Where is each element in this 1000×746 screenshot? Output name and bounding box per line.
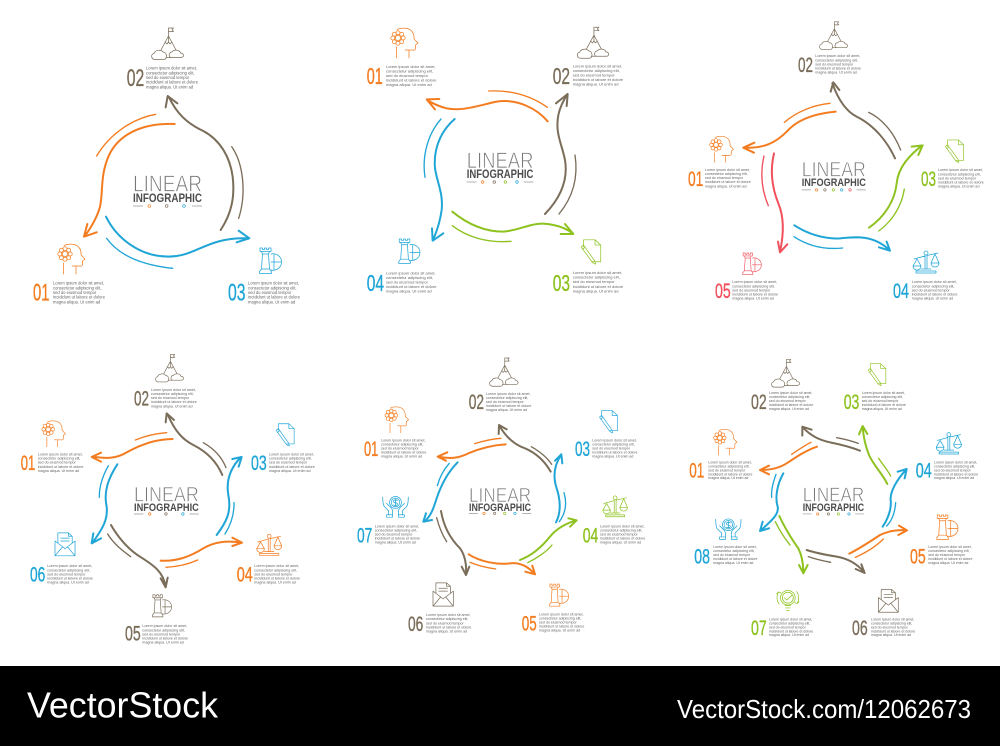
step 02: magna aliqua. Ut enim ad	[769, 407, 809, 411]
step 06: consectetur adipiscing elit,	[426, 617, 468, 621]
step 04: magna aliqua. Ut enim ad	[386, 289, 432, 294]
step 01: incididunt ut labore et dolore	[386, 77, 437, 82]
arrows	[760, 426, 907, 573]
step 01: incididunt ut labore et dolore	[708, 472, 753, 476]
center title: LINEAR	[802, 158, 866, 182]
step 07: magna aliqua. Ut enim ad	[769, 633, 809, 637]
step 01: magna aliqua. Ut enim ad	[38, 469, 79, 473]
step 01: Lorem ipsum dolor sit amet,	[53, 281, 104, 286]
step 03: magna aliqua. Ut enim ad	[248, 299, 296, 304]
step 02: Lorem ipsum dolor sit amet,	[815, 54, 860, 58]
step 05: sed do eiusmod tempor	[142, 632, 181, 636]
step 01: consectetur adipiscing elit,	[705, 172, 748, 176]
step 06	[30, 533, 93, 587]
step 03: incididunt ut labore et dolore	[573, 284, 624, 289]
center title	[802, 158, 866, 191]
step 07: 07	[357, 525, 372, 548]
step 05: 05	[522, 613, 537, 636]
step 02: magna aliqua. Ut enim ad	[146, 84, 194, 89]
step 03: magna aliqua. Ut enim ad	[862, 407, 902, 411]
arrow: brown	[166, 96, 243, 230]
step 06: incididunt ut labore et dolore	[426, 625, 471, 629]
step 04: sed do eiusmod tempor	[254, 572, 293, 576]
arrow: brown	[545, 94, 576, 214]
arrow: green	[452, 212, 573, 242]
step 04: 04	[237, 564, 253, 587]
panel: four-step cycle	[367, 27, 624, 296]
step 02: 02	[798, 54, 813, 77]
step 02	[751, 359, 813, 414]
step 01: Lorem ipsum dolor sit amet,	[705, 168, 750, 172]
step 04: Lorem ipsum dolor sit amet,	[934, 460, 977, 464]
step 01: consectetur adipiscing elit,	[38, 457, 80, 461]
step 04: consectetur adipiscing elit,	[386, 275, 433, 280]
step 02: incididunt ut labore et dolore	[573, 77, 624, 82]
arrows	[84, 96, 249, 268]
step 04: incididunt ut labore et dolore	[934, 472, 978, 476]
step 02: consectetur adipiscing elit,	[573, 68, 620, 73]
step 01: incididunt ut labore et dolore	[705, 180, 751, 184]
step 05: Lorem ipsum dolor sit amet,	[732, 280, 777, 284]
center title: INFOGRAPHIC	[467, 168, 534, 181]
step 06: consectetur adipiscing elit,	[47, 568, 90, 572]
step 01	[689, 429, 753, 483]
step 06	[852, 589, 915, 640]
step 05: 05	[715, 280, 731, 303]
step 05: sed do eiusmod tempor	[539, 621, 578, 625]
center title: LINEAR	[803, 484, 864, 507]
step 04: incididunt ut labore et dolore	[386, 284, 437, 289]
step 01: Lorem ipsum dolor sit amet,	[38, 452, 83, 456]
step 03: Lorem ipsum dolor sit amet,	[592, 438, 637, 442]
arrow: green 7	[775, 516, 808, 573]
step 03: sed do eiusmod tempor	[862, 399, 899, 403]
step 06: sed do eiusmod tempor	[47, 572, 86, 576]
step 03: magna aliqua. Ut enim ad	[938, 185, 980, 189]
footer brand: VectorStock	[27, 684, 219, 726]
step 03: 03	[228, 280, 246, 307]
step 02: incididunt ut labore et dolore	[146, 80, 199, 85]
step 06: magna aliqua. Ut enim ad	[47, 581, 89, 585]
step 07	[357, 497, 420, 548]
step 03: 03	[844, 391, 859, 414]
step 02: 02	[553, 63, 570, 89]
step 05: magna aliqua. Ut enim ad	[142, 641, 184, 645]
step 03: Lorem ipsum dolor sit amet,	[269, 452, 314, 456]
step 01: magna aliqua. Ut enim ad	[381, 455, 422, 459]
arrow: red	[762, 153, 787, 252]
step 01: sed do eiusmod tempor	[53, 290, 97, 295]
arrow: brown 6	[437, 511, 469, 575]
step 07: sed do eiusmod tempor	[375, 533, 413, 537]
step 05: Lorem ipsum dolor sit amet,	[142, 624, 187, 628]
step 02: consectetur adipiscing elit,	[815, 58, 858, 62]
step 04: Lorem ipsum dolor sit amet,	[912, 280, 957, 284]
step 04: consectetur adipiscing elit,	[254, 568, 297, 572]
step 05: magna aliqua. Ut enim ad	[732, 297, 774, 301]
step 04: 04	[583, 525, 599, 548]
step 03: incididunt ut labore et dolore	[862, 403, 906, 407]
step 02: magna aliqua. Ut enim ad	[573, 82, 618, 87]
step 06: magna aliqua. Ut enim ad	[426, 629, 467, 633]
step 06: magna aliqua. Ut enim ad	[871, 633, 911, 637]
step 02	[798, 22, 861, 77]
step 02: sed do eiusmod tempor	[769, 399, 807, 403]
step 03	[553, 240, 624, 296]
step 08	[694, 519, 758, 568]
step 02: consectetur adipiscing elit,	[486, 396, 528, 400]
arrow: blue	[794, 225, 890, 251]
step 02: Lorem ipsum dolor sit amet,	[486, 392, 531, 396]
step 06	[408, 583, 471, 636]
step 02: 02	[469, 391, 484, 414]
panel: five-step cycle	[688, 22, 984, 303]
arrow: orange	[743, 103, 836, 153]
step 02: Lorem ipsum dolor sit amet,	[146, 66, 197, 71]
step 06: 06	[408, 613, 423, 636]
step 08: 08	[694, 545, 710, 568]
center title: LINEAR	[133, 171, 202, 197]
arrows	[424, 91, 576, 242]
step 03: consectetur adipiscing elit,	[248, 285, 297, 290]
step 01: magna aliqua. Ut enim ad	[705, 184, 747, 188]
step 03: 03	[575, 438, 590, 461]
step 01: sed do eiusmod tempor	[38, 461, 77, 465]
step 01: incididunt ut labore et dolore	[53, 295, 106, 300]
step 02: 02	[751, 391, 767, 414]
step 02: incididunt ut labore et dolore	[815, 66, 861, 70]
step 08: incididunt ut labore et dolore	[713, 557, 758, 561]
step 02: sed do eiusmod tempor	[146, 75, 190, 80]
arrow: orange	[84, 114, 175, 237]
panel: seven-step cycle	[357, 358, 645, 636]
step 01: Lorem ipsum dolor sit amet,	[708, 460, 752, 464]
step 06: consectetur adipiscing elit,	[871, 621, 912, 625]
arrow: blue 8	[760, 473, 783, 531]
panel: eight-step cycle	[689, 359, 978, 640]
step 03: Lorem ipsum dolor sit amet,	[938, 168, 983, 172]
step 01: 01	[21, 452, 35, 475]
arrow: orange	[427, 91, 548, 121]
step 08: Lorem ipsum dolor sit amet,	[713, 545, 757, 549]
step 04: Lorem ipsum dolor sit amet,	[386, 270, 436, 275]
step 01: consectetur adipiscing elit,	[386, 68, 433, 73]
step 01: Lorem ipsum dolor sit amet,	[386, 64, 436, 69]
step 02: incididunt ut labore et dolore	[486, 404, 531, 408]
step 08: sed do eiusmod tempor	[713, 553, 751, 557]
arrow: brown 2	[499, 425, 552, 472]
step 04: consectetur adipiscing elit,	[600, 528, 642, 532]
step 04: consectetur adipiscing elit,	[912, 284, 954, 288]
step 04: Lorem ipsum dolor sit amet,	[600, 524, 645, 528]
step 02: magna aliqua. Ut enim ad	[151, 404, 193, 408]
step 05	[715, 253, 778, 303]
step 03: incididunt ut labore et dolore	[938, 180, 984, 184]
step 01	[367, 28, 437, 89]
step 04: sed do eiusmod tempor	[386, 280, 429, 285]
center title: LINEAR	[467, 148, 533, 173]
arrow: blue	[106, 217, 249, 268]
step 03	[228, 248, 301, 307]
step 03: incididunt ut labore et dolore	[269, 465, 315, 469]
step 06: sed do eiusmod tempor	[871, 625, 909, 629]
arrow: green	[869, 145, 923, 231]
step 01: 01	[689, 460, 704, 483]
arrow: brown 5	[108, 525, 168, 587]
footer image id: VectorStock.com/12062673	[677, 694, 971, 724]
step 02: sed do eiusmod tempor	[573, 73, 615, 78]
arrow: orange 1	[760, 442, 817, 474]
step 04	[237, 534, 300, 587]
step 01	[688, 136, 751, 191]
step 02	[134, 354, 197, 411]
step 03: consectetur adipiscing elit,	[592, 442, 635, 446]
step 02: consectetur adipiscing elit,	[769, 395, 810, 399]
step 01: sed do eiusmod tempor	[381, 447, 420, 451]
center title: INFOGRAPHIC	[803, 502, 864, 514]
step 03: sed do eiusmod tempor	[592, 447, 631, 451]
step 03: magna aliqua. Ut enim ad	[573, 288, 618, 293]
step 04: 04	[893, 280, 909, 303]
step 05: consectetur adipiscing elit,	[928, 549, 970, 553]
step 04: magna aliqua. Ut enim ad	[600, 541, 641, 545]
step 05: incididunt ut labore et dolore	[539, 625, 584, 629]
step 02: sed do eiusmod tempor	[486, 400, 525, 404]
step 06: Lorem ipsum dolor sit amet,	[426, 613, 471, 617]
step 04: sed do eiusmod tempor	[600, 533, 639, 537]
step 03: Lorem ipsum dolor sit amet,	[248, 281, 299, 286]
step 07: consectetur adipiscing elit,	[375, 528, 417, 532]
step 02: Lorem ipsum dolor sit amet,	[573, 63, 622, 68]
step 03: 03	[251, 452, 267, 475]
step 03: Lorem ipsum dolor sit amet,	[862, 391, 905, 395]
center title: INFOGRAPHIC	[133, 191, 202, 205]
step 05: incididunt ut labore et dolore	[928, 557, 973, 561]
step 04: Lorem ipsum dolor sit amet,	[254, 564, 299, 568]
step 05: magna aliqua. Ut enim ad	[539, 629, 580, 633]
step 02: sed do eiusmod tempor	[815, 62, 854, 66]
center title	[469, 484, 531, 515]
step 04: incididunt ut labore et dolore	[254, 576, 300, 580]
step 04: sed do eiusmod tempor	[912, 288, 951, 292]
step 02: magna aliqua. Ut enim ad	[815, 71, 857, 75]
step 01: 01	[688, 168, 703, 191]
center title	[134, 481, 199, 515]
arrow: green 3	[859, 426, 891, 484]
step 06: incididunt ut labore et dolore	[871, 629, 915, 633]
arrow: brown 6	[807, 550, 865, 573]
arrows	[743, 82, 923, 252]
step 02: Lorem ipsum dolor sit amet,	[151, 388, 196, 392]
step 05: 05	[125, 623, 141, 646]
arrow: blue 6	[92, 464, 117, 543]
step 03: Lorem ipsum dolor sit amet,	[573, 270, 622, 275]
step 07: Lorem ipsum dolor sit amet,	[769, 617, 812, 621]
step 02: 02	[134, 388, 149, 411]
arrow: orange 5	[849, 526, 907, 557]
step 02: consectetur adipiscing elit,	[146, 70, 195, 75]
step 03: magna aliqua. Ut enim ad	[269, 469, 311, 473]
step 08: magna aliqua. Ut enim ad	[713, 561, 753, 565]
step 05: Lorem ipsum dolor sit amet,	[928, 545, 972, 549]
step 03	[251, 424, 315, 475]
step 05: Lorem ipsum dolor sit amet,	[539, 612, 584, 616]
step 07: consectetur adipiscing elit,	[769, 621, 810, 625]
step 04: sed do eiusmod tempor	[934, 468, 972, 472]
step 03: consectetur adipiscing elit,	[573, 275, 620, 280]
step 01: 01	[367, 63, 383, 89]
step 02	[553, 27, 624, 89]
step 07: magna aliqua. Ut enim ad	[375, 541, 416, 545]
center title	[803, 484, 864, 515]
arrow: orange 4	[161, 538, 242, 567]
step 05	[910, 515, 973, 568]
panel: six-step cycle	[21, 354, 315, 646]
step 01: incididunt ut labore et dolore	[381, 451, 426, 455]
step 04: magna aliqua. Ut enim ad	[912, 297, 953, 301]
step 07: incididunt ut labore et dolore	[375, 537, 420, 541]
step 07	[751, 590, 813, 640]
step 01: Lorem ipsum dolor sit amet,	[381, 438, 426, 442]
arrows	[92, 413, 242, 587]
step 01: sed do eiusmod tempor	[386, 73, 429, 78]
step 04	[583, 496, 645, 548]
step 06: Lorem ipsum dolor sit amet,	[871, 617, 914, 621]
center title: INFOGRAPHIC	[469, 502, 531, 514]
step 05: 05	[910, 545, 926, 568]
step 04: consectetur adipiscing elit,	[934, 464, 975, 468]
step 06: 06	[30, 564, 45, 587]
center title: INFOGRAPHIC	[802, 177, 866, 189]
center title: LINEAR	[469, 484, 531, 507]
center title	[467, 148, 534, 183]
step 07: 07	[751, 617, 767, 640]
step 01: consectetur adipiscing elit,	[708, 464, 750, 468]
step 04: magna aliqua. Ut enim ad	[254, 581, 296, 585]
arrow: orange 1	[438, 438, 506, 461]
step 04: incididunt ut labore et dolore	[912, 292, 957, 296]
step 05	[522, 584, 584, 636]
arrow: brown 2	[802, 427, 860, 451]
step 02: incididunt ut labore et dolore	[151, 400, 197, 404]
step 04: magna aliqua. Ut enim ad	[934, 476, 974, 480]
step 02: magna aliqua. Ut enim ad	[486, 408, 527, 412]
arrow: orange 1	[92, 433, 173, 462]
step 01: 01	[33, 280, 50, 307]
arrow: blue	[424, 119, 455, 241]
step 01: 01	[364, 438, 378, 461]
step 01: consectetur adipiscing elit,	[381, 442, 423, 446]
step 01	[364, 407, 426, 461]
step 02	[469, 358, 531, 414]
arrow: brown	[831, 82, 901, 158]
step 07: sed do eiusmod tempor	[769, 625, 807, 629]
step 05: consectetur adipiscing elit,	[539, 616, 581, 620]
step 05: incididunt ut labore et dolore	[732, 292, 778, 296]
step 04	[893, 251, 957, 303]
step 07: incididunt ut labore et dolore	[769, 629, 813, 633]
step 01: incididunt ut labore et dolore	[38, 465, 83, 469]
center title	[133, 171, 202, 207]
step 06: incididunt ut labore et dolore	[47, 576, 93, 580]
step 03: consectetur adipiscing elit,	[269, 457, 312, 461]
step 03	[575, 411, 638, 461]
step 04: incididunt ut labore et dolore	[600, 537, 645, 541]
arrow: blue 3	[217, 457, 242, 535]
step 08: consectetur adipiscing elit,	[713, 549, 755, 553]
step 03: 03	[553, 270, 570, 296]
step 01	[33, 244, 106, 307]
arrow: brown 2	[166, 413, 226, 475]
step 03: incididunt ut labore et dolore	[248, 295, 301, 300]
step 01	[21, 421, 83, 475]
step 02: incididunt ut labore et dolore	[769, 403, 813, 407]
step 03: 03	[921, 168, 936, 191]
arrow: green 4	[520, 518, 577, 563]
step 02: sed do eiusmod tempor	[151, 396, 190, 400]
arrow: blue 7	[423, 462, 458, 522]
center title: INFOGRAPHIC	[134, 502, 199, 514]
step 01: sed do eiusmod tempor	[708, 468, 746, 472]
panel: three-step cycle	[33, 28, 301, 307]
step 03: incididunt ut labore et dolore	[592, 451, 638, 455]
step 05: consectetur adipiscing elit,	[732, 284, 775, 288]
step 01: consectetur adipiscing elit,	[53, 285, 102, 290]
step 02: consectetur adipiscing elit,	[151, 392, 194, 396]
step 05	[125, 595, 188, 646]
step 05: incididunt ut labore et dolore	[142, 636, 188, 640]
step 03: consectetur adipiscing elit,	[862, 395, 903, 399]
step 03: magna aliqua. Ut enim ad	[592, 455, 633, 459]
arrows	[423, 425, 577, 575]
step 04: 04	[367, 270, 384, 296]
step 04: 04	[916, 460, 932, 483]
arrow: blue 4	[883, 469, 907, 527]
arrow: blue 3	[555, 454, 566, 522]
arrow: orange 5	[469, 554, 535, 574]
step 02	[127, 28, 199, 92]
center title: LINEAR	[134, 481, 199, 506]
step 02: Lorem ipsum dolor sit amet,	[769, 391, 812, 395]
step 04	[916, 433, 978, 483]
step 01: magna aliqua. Ut enim ad	[386, 82, 432, 87]
step 03: sed do eiusmod tempor	[248, 290, 292, 295]
step 03: consectetur adipiscing elit,	[938, 172, 981, 176]
step 03: sed do eiusmod tempor	[573, 279, 615, 284]
step 06: Lorem ipsum dolor sit amet,	[47, 564, 92, 568]
step 07: Lorem ipsum dolor sit amet,	[375, 524, 419, 528]
step 03	[844, 364, 906, 414]
step 03	[921, 140, 984, 191]
step 05: sed do eiusmod tempor	[928, 553, 966, 557]
step 05: sed do eiusmod tempor	[732, 288, 771, 292]
step 01: sed do eiusmod tempor	[705, 176, 744, 180]
step 06: sed do eiusmod tempor	[426, 621, 465, 625]
step 03: sed do eiusmod tempor	[269, 461, 308, 465]
step 04	[367, 239, 437, 296]
step 01: magna aliqua. Ut enim ad	[708, 476, 748, 480]
step 06: 06	[852, 617, 868, 640]
step 05: consectetur adipiscing elit,	[142, 628, 185, 632]
step 01: magna aliqua. Ut enim ad	[53, 299, 101, 304]
step 03: sed do eiusmod tempor	[938, 176, 977, 180]
step 02: 02	[127, 65, 144, 92]
footer bar	[0, 666, 1000, 746]
step 05: magna aliqua. Ut enim ad	[928, 561, 968, 565]
